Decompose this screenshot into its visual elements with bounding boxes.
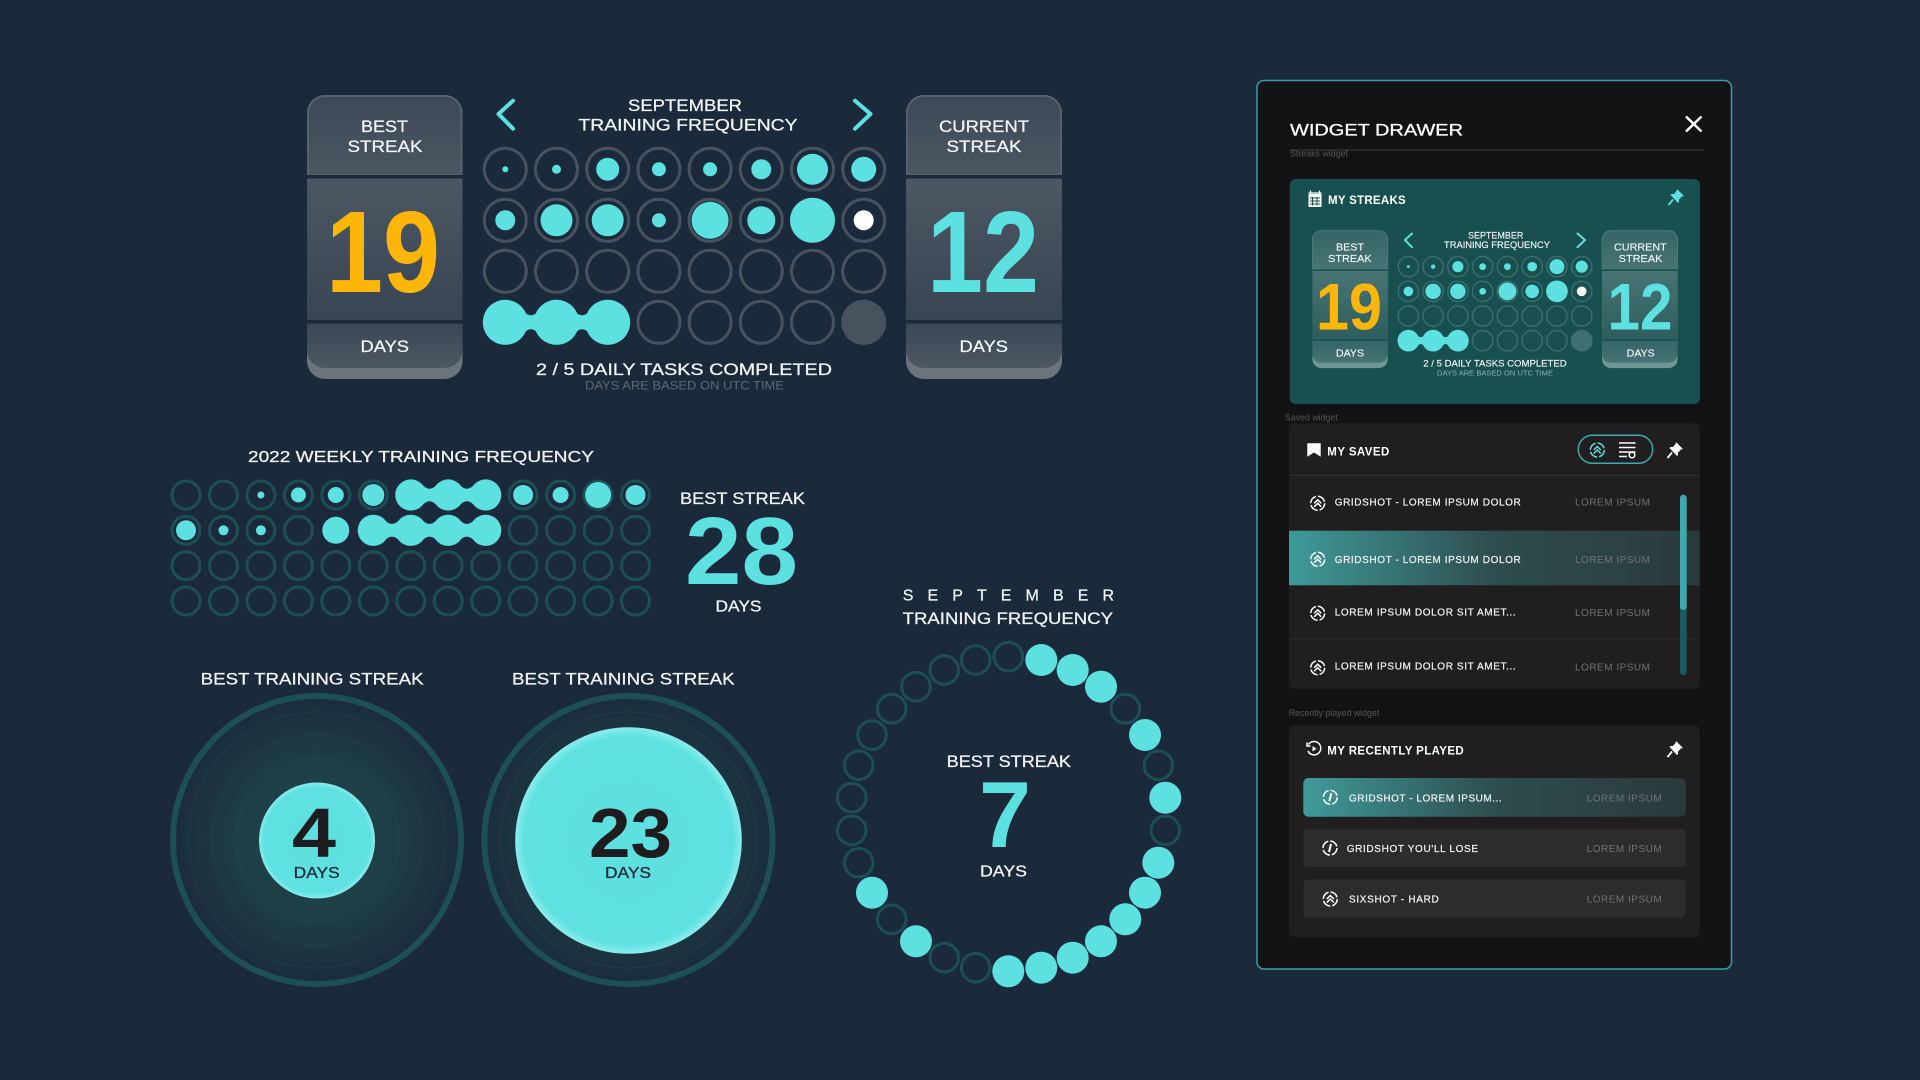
- saved row 4: [1311, 661, 1650, 675]
- value: DAYS: [605, 865, 651, 882]
- saved row 1: LOREM IPSUM: [1575, 497, 1650, 508]
- heading: SEPTEMBER: [903, 588, 1114, 605]
- panel: my recently played: [1289, 725, 1700, 937]
- panel: my streaks: [1290, 179, 1700, 404]
- mini current streak card: [1602, 231, 1678, 368]
- my streaks title: MY STREAKS: [1328, 195, 1406, 207]
- mini current streak card: DAYS: [1627, 348, 1655, 360]
- calendar header with arrows: SEPTEMBER: [628, 97, 742, 115]
- mini dot grid: [1397, 257, 1593, 352]
- saved row 2 highlighted: GRIDSHOT - LOREM IPSUM DOLOR: [1335, 555, 1521, 566]
- weekly title: 2022 WEEKLY TRAINING FREQUENCY: [248, 449, 594, 466]
- drawer title: WIDGET DRAWER: [1290, 121, 1463, 140]
- saved row 3: [1311, 606, 1650, 620]
- mini current streak card: CURRENT: [1614, 241, 1667, 253]
- saved row 2 highlighted: LOREM IPSUM: [1575, 555, 1650, 566]
- value: 4: [292, 794, 336, 872]
- progress ring: [173, 696, 461, 984]
- mini header: SEPTEMBER: [1468, 230, 1523, 241]
- widget: 2022 weekly training frequency: [172, 449, 805, 616]
- streaks section label: Streaks widget: [1290, 148, 1348, 158]
- saved row 4: LOREM IPSUM: [1575, 663, 1650, 674]
- calendar dot grid: [483, 148, 886, 345]
- weekly best streak number: DAYS: [716, 599, 762, 616]
- played row 2: LOREM IPSUM: [1587, 844, 1662, 855]
- mini best streak card: DAYS: [1336, 348, 1364, 360]
- icon: pin: [1668, 189, 1684, 205]
- current streak card: DAYS: [960, 338, 1008, 356]
- calendar header with arrows: TRAINING FREQUENCY: [578, 116, 798, 134]
- saved row 2 highlighted: [1311, 552, 1650, 566]
- recently played section label: Recently played widget: [1289, 708, 1380, 718]
- saved row 4: LOREM IPSUM DOLOR SIT AMET...: [1335, 662, 1516, 673]
- mini best streak card: [1312, 231, 1388, 368]
- current streak card: 12: [927, 187, 1039, 317]
- highlighted row background: [1289, 531, 1700, 585]
- daily tasks caption: 2 / 5 DAILY TASKS COMPLETED: [536, 361, 832, 379]
- mini current streak card: 12: [1608, 269, 1672, 343]
- centre value: BEST STREAK: [947, 753, 1071, 771]
- weekly dot grid: [172, 479, 650, 615]
- mini header: TRAINING FREQUENCY: [1444, 240, 1551, 251]
- weekly best streak number: 28: [685, 498, 798, 605]
- icon: pin: [1668, 741, 1683, 757]
- widget: circular september frequency: [837, 588, 1181, 987]
- mini best streak card: 19: [1316, 269, 1382, 343]
- close icon: [1686, 116, 1702, 132]
- panel: widget drawer: [1257, 80, 1732, 969]
- saved row 3: LOREM IPSUM DOLOR SIT AMET...: [1335, 607, 1516, 618]
- played row 1: GRIDSHOT - LOREM IPSUM...: [1349, 793, 1502, 804]
- played row 2: GRIDSHOT YOU'LL LOSE: [1347, 844, 1478, 855]
- recently played title: MY RECENTLY PLAYED: [1327, 745, 1464, 757]
- calendar header with arrows: [498, 97, 870, 134]
- best streak card: STREAK: [348, 138, 422, 156]
- played row 1: [1303, 778, 1686, 817]
- icon: calendar: [1308, 190, 1322, 207]
- centre value: DAYS: [980, 864, 1027, 881]
- mini caption: DAYS ARE BASED ON UTC TIME: [1437, 368, 1553, 378]
- mini best streak card: BEST: [1336, 241, 1365, 253]
- widget: best training streak 23 days: [484, 670, 772, 984]
- best streak card: [307, 95, 462, 379]
- played row 3: [1303, 879, 1686, 918]
- played row 3: LOREM IPSUM: [1587, 895, 1662, 906]
- daily tasks caption: [536, 361, 832, 392]
- best streak card: BEST: [361, 118, 408, 136]
- saved row 1: GRIDSHOT - LOREM IPSUM DOLOR: [1335, 497, 1521, 508]
- scrollbar: [1680, 495, 1687, 675]
- icon: bookmark: [1307, 443, 1321, 457]
- current streak card: STREAK: [946, 138, 1022, 156]
- daily tasks caption: DAYS ARE BASED ON UTC TIME: [585, 380, 784, 392]
- icon: pin: [1668, 442, 1683, 458]
- mini header: [1405, 230, 1585, 251]
- mini current streak card: STREAK: [1619, 253, 1662, 265]
- ring of day dots: [837, 642, 1181, 987]
- progress ring: [484, 696, 772, 984]
- played row 3: SIXSHOT - HARD: [1349, 895, 1439, 906]
- played row 2: [1303, 829, 1686, 867]
- current streak card: [906, 95, 1062, 379]
- centre value: [947, 753, 1071, 881]
- view toggle pill: [1578, 435, 1653, 463]
- panel: my saved: [1289, 423, 1700, 689]
- heading: BEST TRAINING STREAK: [512, 670, 735, 688]
- heading: BEST TRAINING STREAK: [201, 670, 424, 688]
- saved row 3: LOREM IPSUM: [1575, 608, 1650, 619]
- value: 23: [589, 794, 672, 872]
- mini best streak card: STREAK: [1328, 253, 1372, 265]
- mini caption: 2 / 5 DAILY TASKS COMPLETED: [1423, 359, 1567, 370]
- my saved title: MY SAVED: [1327, 446, 1389, 458]
- saved row 1: [1311, 496, 1650, 510]
- best streak card: DAYS: [360, 338, 409, 356]
- icon: replay clock: [1307, 741, 1321, 755]
- heading: [903, 588, 1114, 628]
- centre value: 7: [979, 762, 1031, 867]
- weekly best streak number: BEST STREAK: [680, 490, 805, 508]
- best streak card: 19: [326, 187, 440, 317]
- widget: september streak calendar: [307, 95, 1062, 392]
- mini streak widget: [1312, 230, 1678, 378]
- saved section label: Saved widget: [1285, 413, 1338, 423]
- mini caption: [1423, 359, 1567, 378]
- widget: best training streak 4 days: [173, 670, 461, 984]
- played row 1: LOREM IPSUM: [1587, 793, 1662, 804]
- current streak card: CURRENT: [939, 118, 1029, 136]
- value: DAYS: [294, 865, 340, 882]
- heading: TRAINING FREQUENCY: [903, 610, 1113, 628]
